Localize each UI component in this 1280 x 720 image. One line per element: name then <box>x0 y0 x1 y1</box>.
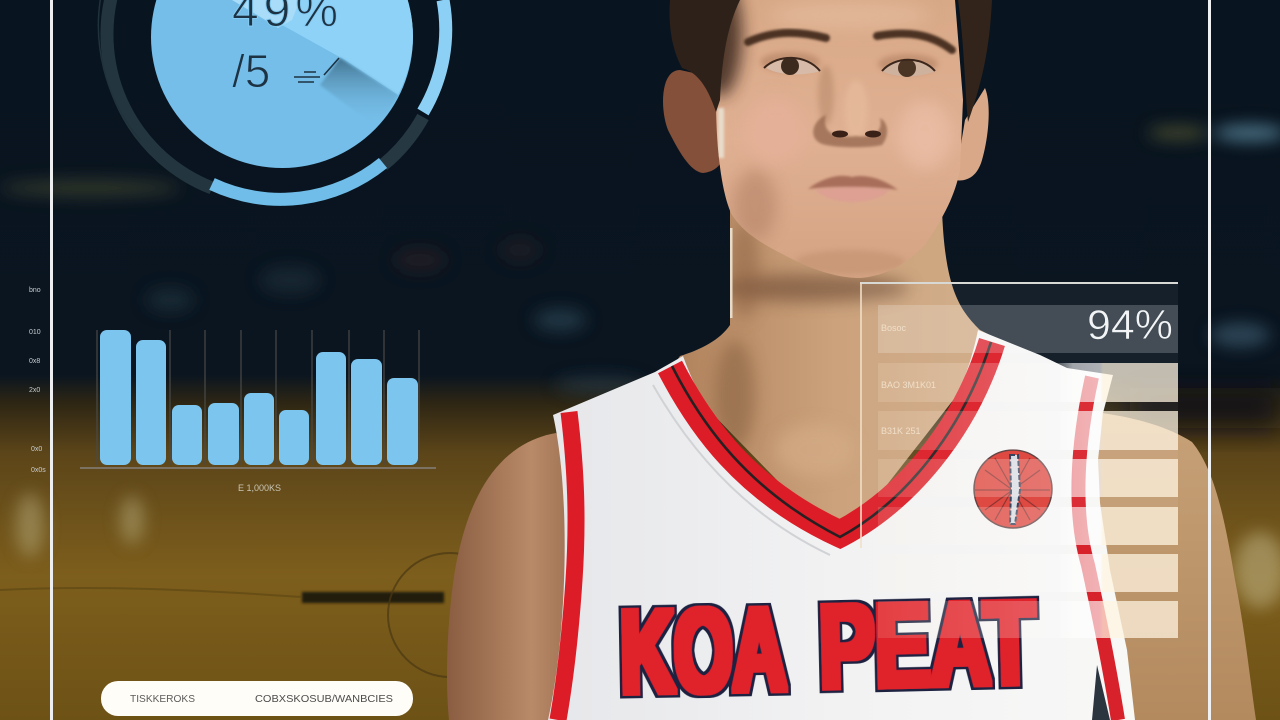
neck shading <box>715 220 910 476</box>
row labels <box>881 323 936 436</box>
neck and chest <box>670 210 1000 545</box>
y-axis labels: 0x0s <box>31 467 46 474</box>
y-axis labels: 0x8 <box>29 358 40 365</box>
ears <box>663 70 726 173</box>
y-axis labels: 0x0 <box>31 446 42 453</box>
outer ring: light segments <box>212 0 446 199</box>
pie disc <box>151 0 413 168</box>
nose <box>813 115 887 147</box>
jersey lettering <box>619 575 1037 718</box>
face shading <box>698 0 951 274</box>
row labels: Bosoc <box>881 323 907 333</box>
y-axis labels: bno <box>29 287 41 294</box>
jersey lettering: KOA <box>619 582 787 718</box>
y-axis labels <box>29 287 46 474</box>
bars <box>100 330 418 465</box>
arms <box>447 433 600 720</box>
eyes <box>760 52 938 77</box>
y-axis labels: 2x0 <box>29 387 40 394</box>
outer ring: dark segments <box>107 0 423 188</box>
bottom pill legend: COBXSKOSUB/WANBCIES <box>255 693 393 705</box>
donut chart: /5 <box>232 45 270 97</box>
row labels: B31K 251 <box>881 426 921 436</box>
player photo <box>447 0 1256 720</box>
bar chart <box>29 287 436 493</box>
jersey collar trim <box>653 342 992 555</box>
stats panel overlay <box>860 282 1178 638</box>
bottom pill legend: TISKKEROKS <box>130 694 195 705</box>
row labels: BAO 3M1K01 <box>881 380 936 390</box>
mouth <box>808 176 898 202</box>
jersey lettering: PEAT <box>818 575 1037 713</box>
x-axis caption: E 1,000KS <box>238 483 281 493</box>
donut chart <box>98 0 446 199</box>
bottom pill legend <box>101 681 413 716</box>
eyebrows <box>748 33 952 50</box>
jersey body <box>548 330 1135 720</box>
armhole trims <box>558 377 1118 720</box>
hair <box>668 0 740 112</box>
y-axis labels: 010 <box>29 329 41 336</box>
face <box>716 0 963 278</box>
stat rows <box>878 305 1178 638</box>
jersey badge <box>974 450 1052 528</box>
percent value: 94% <box>1087 301 1173 348</box>
